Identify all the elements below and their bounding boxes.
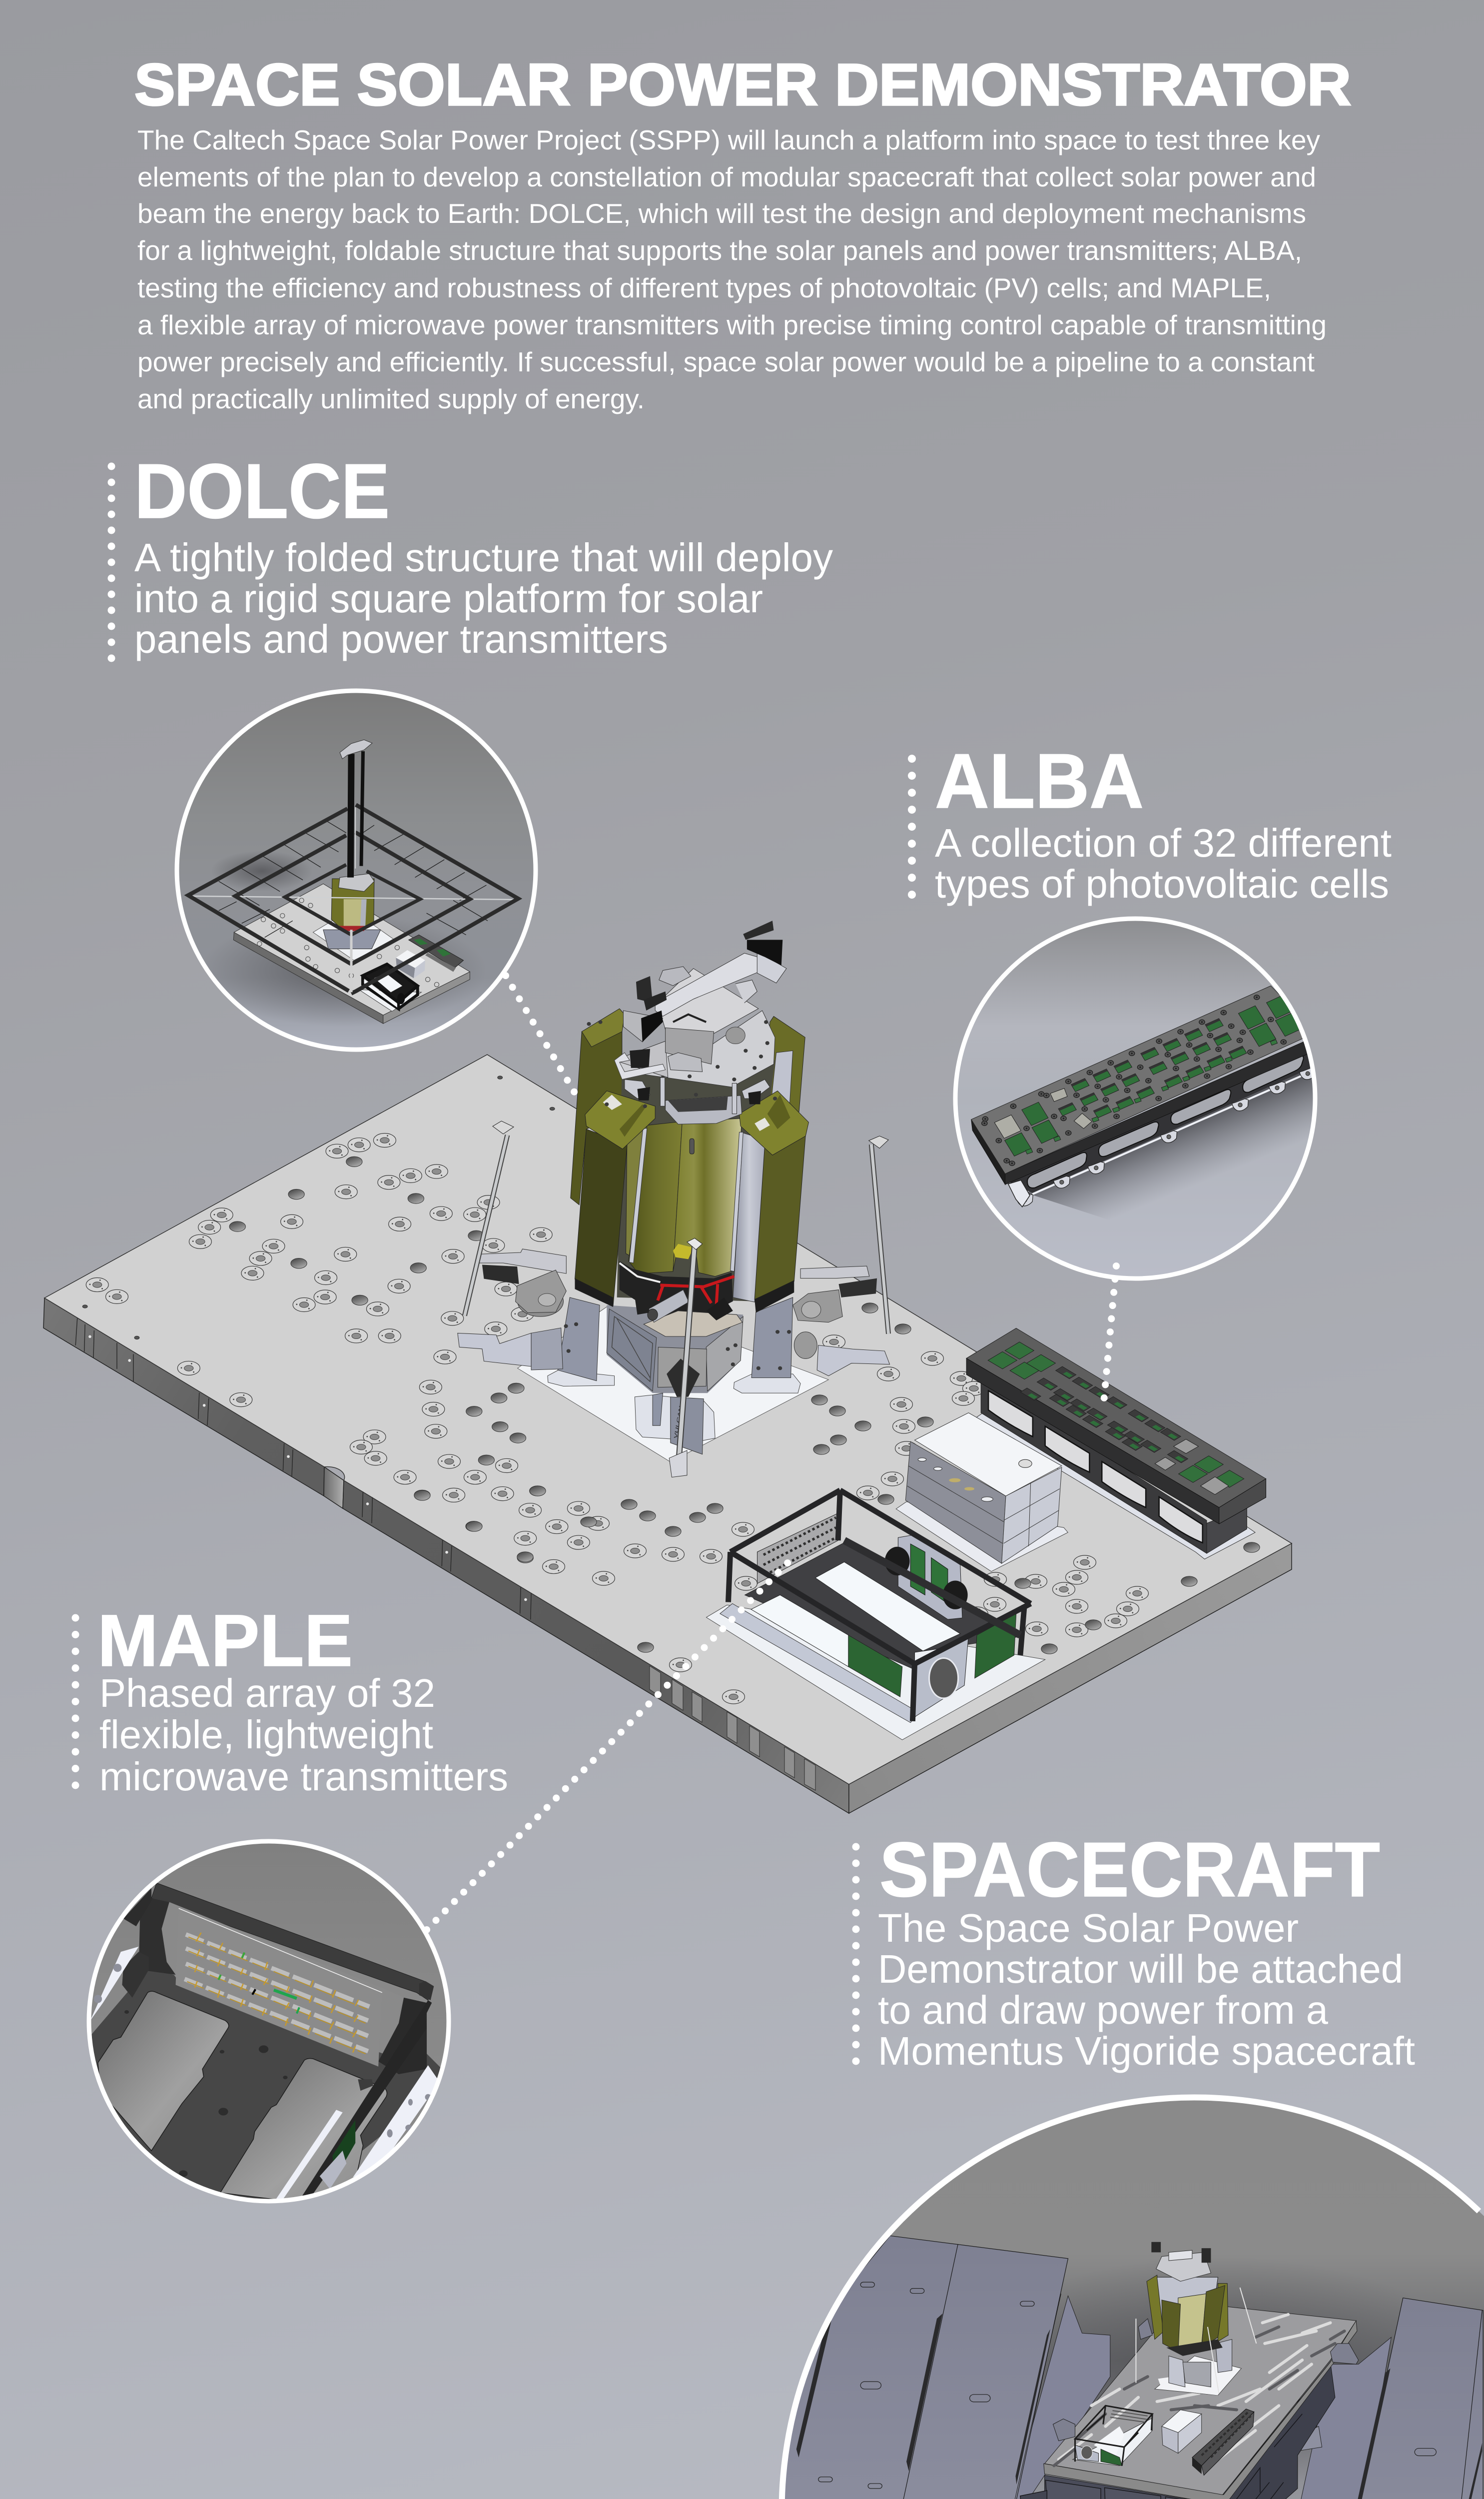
latch strips <box>629 1129 647 1263</box>
green highlights <box>218 1953 299 2014</box>
base housing backing <box>607 1305 743 1393</box>
intro paragraph: power precisely and efficiently. If successful, space solar power would be a pipeline to a constant <box>137 346 1315 377</box>
cubesat <box>1162 2410 1202 2454</box>
leg bolts <box>564 1322 791 1370</box>
payload components <box>707 1328 1266 1740</box>
yellow clip <box>673 1244 694 1259</box>
diamond frame: inner <box>285 865 420 935</box>
phased array panel <box>176 1908 382 2067</box>
oblong openings <box>1027 1056 1304 1188</box>
deck upper plate <box>658 969 758 1034</box>
main platform illustration <box>43 1055 1292 1813</box>
core backing <box>617 1060 775 1301</box>
white base plate <box>518 1305 828 1462</box>
left mechanism foot <box>518 1286 564 1316</box>
mini washers <box>257 898 439 987</box>
description: DOLCE: panels and power transmitters <box>134 617 668 661</box>
central cylinders <box>626 1126 648 1263</box>
description: DOLCE: A tightly folded structure that will deploy <box>134 535 833 580</box>
small cells <box>1058 1019 1247 1118</box>
white rail centre <box>276 2110 343 2200</box>
legs <box>558 1297 600 1381</box>
intro paragraph: for a lightweight, foldable structure that supports the solar panels and power transmitters; ALBA, <box>137 235 1302 266</box>
mini cage <box>359 964 421 1011</box>
diagonal beam <box>299 2000 432 2201</box>
callout: SPACECRAFT <box>856 1826 1415 2073</box>
DOLCE tower assembly <box>518 921 890 1477</box>
front olive box: left <box>575 1129 627 1306</box>
deck side <box>1044 2321 1357 2499</box>
heading: MAPLE: MAPLE <box>97 1600 353 1682</box>
platform side: front-right <box>849 1543 1292 1813</box>
shadow behind spacecraft <box>955 2257 1481 2489</box>
tiny cells <box>1025 1040 1278 1154</box>
intro paragraph <box>137 124 1327 414</box>
intro paragraph: testing the efficiency and robustness of different types of photovoltaic (PV) cells; and MAPLE, <box>137 272 1271 303</box>
mast head <box>340 740 372 759</box>
inset: DOLCE deployed view <box>177 691 536 1050</box>
leader: ALBA <box>1104 1266 1116 1402</box>
battery boxes <box>1045 2480 1226 2499</box>
description: SPACECRAFT <box>878 1906 1415 2073</box>
mini platform side <box>233 932 383 1024</box>
platform side: front-left <box>343 1480 849 1813</box>
inset: ALBA photovoltaic cells <box>955 919 1317 1278</box>
front olive box: right <box>754 1135 805 1299</box>
description: ALBA: A collection of 32 different <box>935 821 1392 865</box>
description: ALBA <box>935 821 1392 906</box>
deck top <box>1045 2306 1356 2495</box>
intro paragraph: The Caltech Space Solar Power Project (SSPP) will launch a platform into space to test three key <box>137 124 1320 155</box>
mini platform <box>234 884 470 1015</box>
description: SPACECRAFT: Momentus Vigoride spacecraft <box>878 2029 1415 2073</box>
supports under deck <box>625 1078 770 1114</box>
right rod <box>871 1145 888 1334</box>
mini white plate <box>313 921 394 961</box>
deck reflections <box>1054 2315 1345 2466</box>
MAPLE cage <box>707 1490 1045 1740</box>
platform top face <box>44 1055 1292 1784</box>
flat ring plate <box>615 1053 666 1080</box>
central pole <box>350 930 353 992</box>
mini cubesat <box>396 950 425 978</box>
feed lines <box>195 1933 358 2053</box>
diamond frame grid <box>219 821 488 938</box>
right solar array <box>1340 2298 1483 2499</box>
platform notch <box>324 1467 344 1508</box>
top frame bar <box>151 1883 433 2000</box>
centre rod <box>678 1244 695 1469</box>
flange tabs <box>1017 1068 1316 1206</box>
right mechanism <box>800 1266 869 1278</box>
description: DOLCE: into a rigid square platform for solar <box>134 576 763 621</box>
description: MAPLE: flexible, lightweight <box>99 1712 433 1757</box>
upper left actuator <box>623 1011 663 1042</box>
description: ALBA: types of photovoltaic cells <box>935 862 1389 906</box>
floor window right <box>220 2059 387 2202</box>
heading: SPACECRAFT: SPACECRAFT <box>879 1826 1380 1913</box>
description: SPACECRAFT: to and draw power from a <box>878 1988 1329 2032</box>
element rows <box>184 1934 369 2054</box>
left rod and actuator <box>458 1121 566 1370</box>
green board <box>332 2120 355 2179</box>
inset: MAPLE transmitter array <box>75 1841 452 2207</box>
white rail right <box>353 2065 440 2178</box>
floor holes <box>124 2010 288 2177</box>
corner posts <box>123 1888 151 1926</box>
intro paragraph: and practically unlimited supply of energy. <box>137 383 645 414</box>
floor plate <box>75 1967 452 2207</box>
large cells <box>994 995 1302 1156</box>
ring below deck <box>666 1096 742 1124</box>
olive brackets <box>585 1091 655 1149</box>
rail side <box>971 1120 1005 1185</box>
arm bar <box>655 953 757 1016</box>
silver cylinder <box>733 1133 765 1302</box>
left solar array <box>777 2236 1068 2499</box>
dotted rule: MAPLE <box>72 1618 79 1787</box>
rear panel left <box>1007 2296 1110 2499</box>
body side <box>1223 2362 1335 2499</box>
body front <box>1045 2475 1227 2499</box>
bolt holes <box>982 995 1286 1166</box>
dotted rule: ALBA <box>908 759 916 896</box>
cage <box>1075 2406 1152 2466</box>
inset: spacecraft <box>777 2097 1484 2499</box>
product marking: VULCAN <box>673 1405 683 1439</box>
heading: ALBA: ALBA <box>935 738 1144 824</box>
white rail left <box>90 1947 139 2021</box>
description: DOLCE <box>134 535 833 661</box>
mini tower <box>323 874 381 949</box>
spacecraft inset ring <box>782 2097 1479 2499</box>
rear panel right <box>1298 2337 1391 2499</box>
dotted rule: SPACECRAFT <box>852 1847 859 2063</box>
mini tower <box>1147 2242 1228 2356</box>
mounting washers and holes <box>82 1076 590 1574</box>
side seams <box>75 1318 531 1619</box>
dotted rule: DOLCE <box>108 466 115 660</box>
rods <box>1136 2288 1256 2393</box>
title: SPACE SOLAR POWER DEMONSTRATOR <box>134 52 1351 118</box>
cylinder tab <box>690 1139 694 1154</box>
description: MAPLE <box>99 1671 508 1799</box>
description: SPACECRAFT: Demonstrator will be attached <box>878 1947 1403 1991</box>
description: MAPLE: microwave transmitters <box>99 1754 508 1799</box>
upper right actuator <box>747 940 782 966</box>
diamond frame rods <box>188 896 518 900</box>
ALBA rail <box>1192 2409 1254 2475</box>
mini tower legs <box>1158 2340 1232 2395</box>
base housing <box>607 1309 657 1391</box>
intro paragraph: elements of the plan to develop a constellation of modular spacecraft that collect solar power and <box>137 161 1316 192</box>
cast shadow <box>1026 1066 1314 1231</box>
cage plate <box>1073 2418 1152 2466</box>
callout: DOLCE <box>111 448 833 661</box>
ALBA rail <box>966 1328 1266 1559</box>
deck lower plate <box>615 1011 775 1087</box>
hinge bracket <box>1300 2427 1322 2451</box>
dark disc and red frame <box>620 1261 733 1316</box>
side pockets near corner <box>650 1666 815 1790</box>
back olive panels <box>571 1032 622 1205</box>
flange line <box>1032 1069 1317 1194</box>
diamond frame: outer <box>188 805 518 994</box>
back opening <box>161 1902 406 2054</box>
rail top face <box>971 986 1317 1174</box>
side unit <box>1020 2491 1047 2499</box>
white cubesat <box>896 1413 1068 1571</box>
heading: DOLCE: DOLCE <box>134 448 390 534</box>
platform side: left <box>43 1298 324 1496</box>
callout: MAPLE <box>75 1600 508 1799</box>
description: MAPLE: Phased array of 32 <box>99 1671 435 1715</box>
leader: MAPLE <box>427 1554 796 1930</box>
beige plate <box>644 1311 742 1336</box>
mini platform shadow <box>223 929 464 1020</box>
flange feet <box>548 1370 800 1441</box>
leader: DOLCE <box>506 976 575 1093</box>
intro paragraph: a flexible array of microwave power transmitters with precise timing control capable of transmitting <box>137 309 1327 340</box>
deck white plate <box>1155 2356 1241 2395</box>
diamond frame: middle <box>235 832 470 964</box>
deck bolts and holes <box>587 1020 777 1108</box>
hinge blocks <box>1053 2319 1359 2441</box>
description: SPACECRAFT: The Space Solar Power <box>878 1906 1299 1950</box>
support frame <box>1005 1043 1317 1193</box>
end foot <box>1008 1180 1030 1207</box>
centre block <box>658 1347 707 1387</box>
callout: ALBA <box>912 738 1392 906</box>
mini ALBA rail <box>409 935 464 972</box>
floor window left <box>98 1991 229 2151</box>
motor <box>649 1290 689 1322</box>
intro paragraph: beam the energy back to Earth: DOLCE, which will test the design and deployment mechanisms <box>137 198 1306 229</box>
